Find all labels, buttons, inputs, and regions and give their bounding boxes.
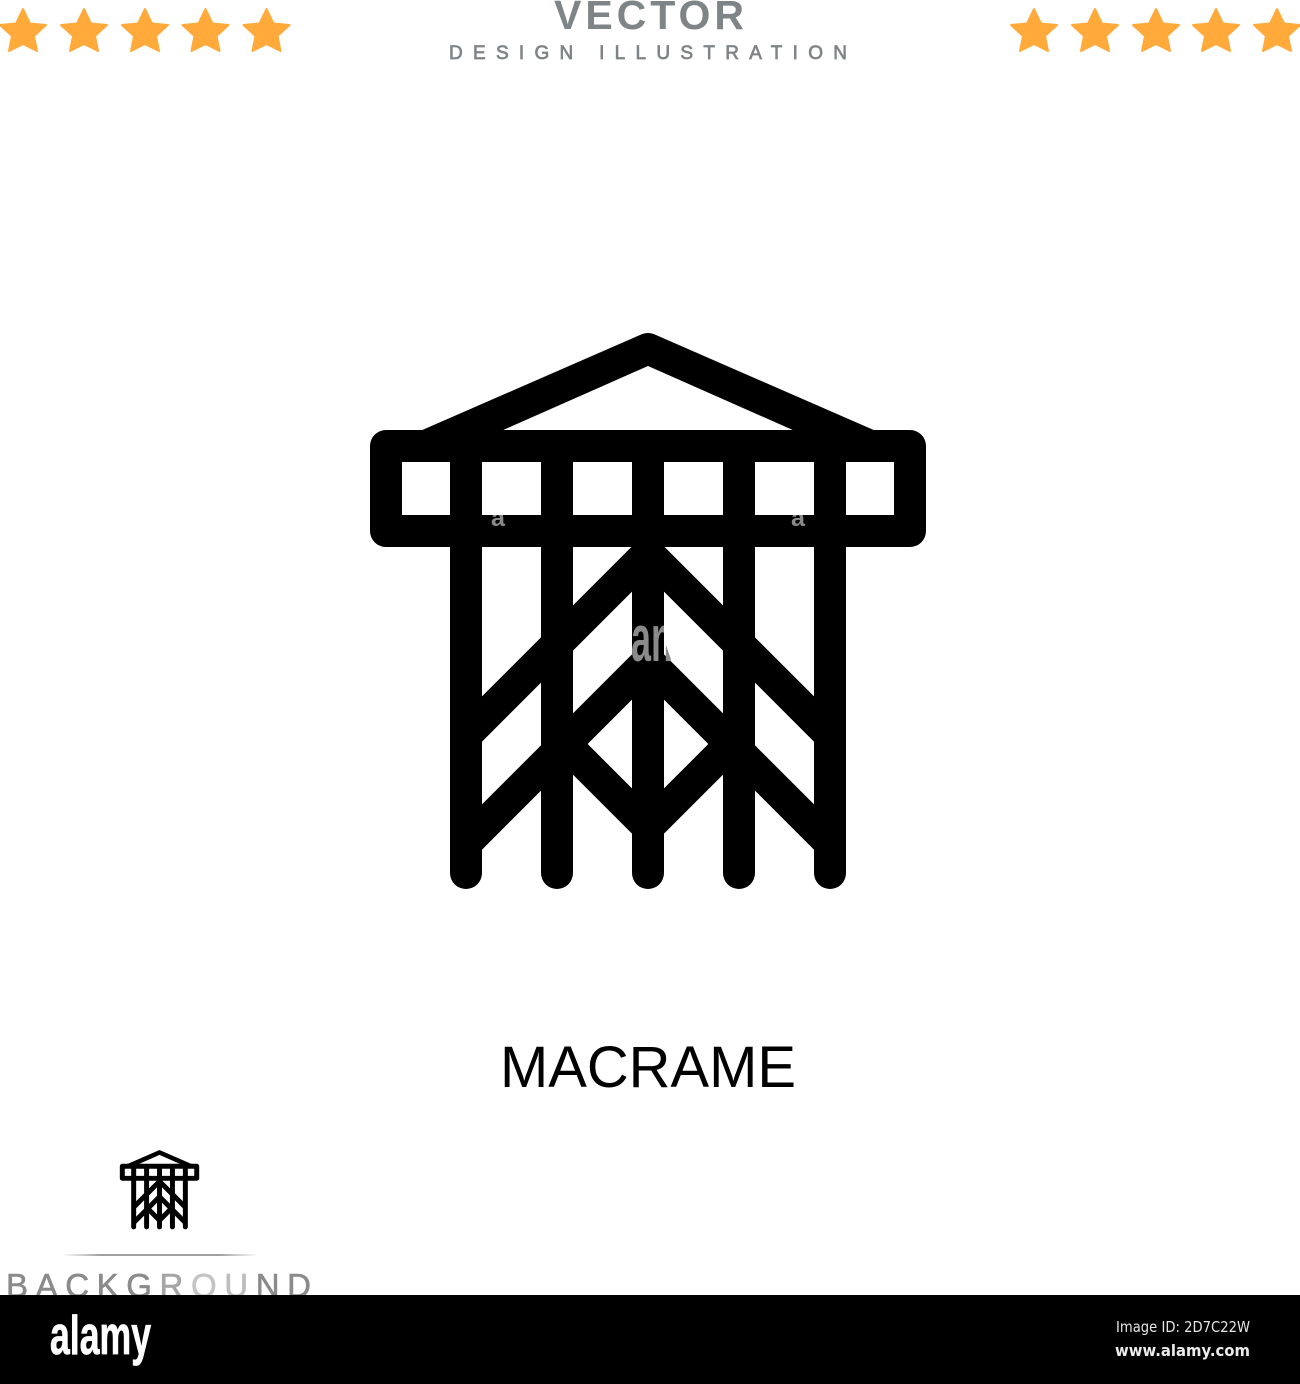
watermark fragments: a xyxy=(491,505,506,532)
icon: macrame small xyxy=(122,1150,197,1227)
title: MACRAME: MACRAME xyxy=(500,1035,796,1100)
website: www.alamy.com xyxy=(1115,1341,1250,1360)
image id: Image ID: 2D7C22W xyxy=(1116,1318,1250,1336)
subheading: DESIGN ILLUSTRATION: DESIGN ILLUSTRATION xyxy=(449,43,847,64)
label: BACKGROUND: BACKGROUND xyxy=(6,1267,311,1304)
icon: five stars left xyxy=(0,9,290,51)
watermark fragments: a xyxy=(791,505,806,532)
footer bar xyxy=(0,1295,1300,1384)
watermark fragments xyxy=(492,515,806,662)
logo: alamy: alamy xyxy=(50,1304,151,1366)
icon: five stars right xyxy=(1011,9,1300,51)
watermark fragments: an xyxy=(631,601,673,675)
icon: macrame large xyxy=(386,333,910,873)
